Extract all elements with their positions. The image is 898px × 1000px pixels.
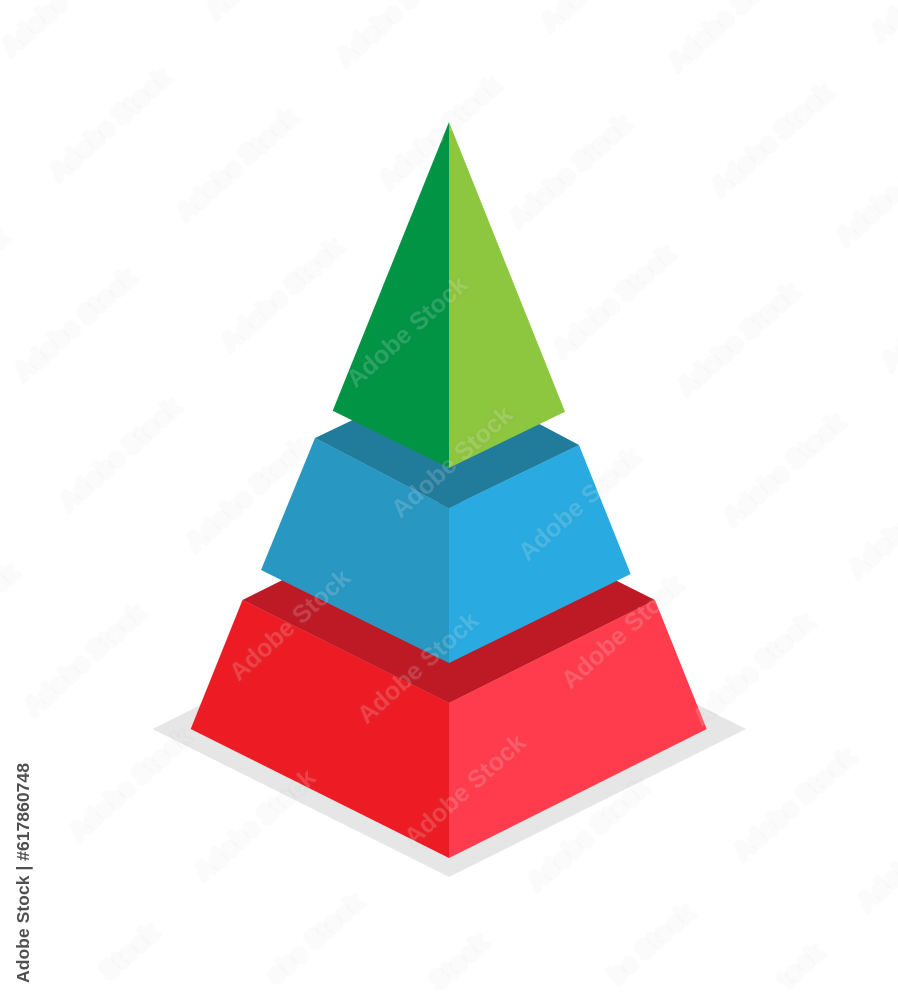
watermark pattern: Adobe Stock xyxy=(706,78,838,202)
bottom tier: red xyxy=(191,497,707,858)
red top face xyxy=(242,497,655,703)
blue right face xyxy=(449,445,631,663)
watermark pattern: Adobe Stock xyxy=(718,408,850,532)
watermark pattern: Adobe Stock xyxy=(54,393,186,517)
watermark pattern: Adobe Stock xyxy=(352,606,484,730)
watermark pattern: Adobe Stock xyxy=(9,263,141,387)
watermark pattern: obe Stock xyxy=(261,889,369,989)
watermark pattern: Adobe Stock xyxy=(522,773,654,897)
watermark pattern: Adobe Stock xyxy=(513,443,645,567)
middle tier: blue xyxy=(261,375,631,663)
watermark pattern: Adobe Stock xyxy=(44,63,176,187)
top tier: green xyxy=(333,122,565,468)
blue top face xyxy=(315,375,579,508)
blue left face xyxy=(261,438,449,663)
stock credit text: Adobe Stock | #617860748 xyxy=(13,763,33,983)
watermark pattern: Adobe Stock xyxy=(504,110,636,234)
green left face xyxy=(333,122,449,468)
watermark pattern: Adobe Stock xyxy=(672,278,804,402)
red left face xyxy=(191,600,449,858)
watermark pattern: Adobe Stock xyxy=(341,270,473,394)
watermark pattern: Stock xyxy=(424,929,494,995)
red right face xyxy=(449,600,707,858)
watermark pattern: Adobe Stock xyxy=(386,400,518,524)
watermark pattern: Adobe Stock xyxy=(64,723,196,847)
watermark pattern: Adobe Stock xyxy=(181,433,313,557)
watermark pattern: be Stock xyxy=(603,899,699,989)
watermark pattern: Adobe Stock xyxy=(728,743,860,867)
ground shadow xyxy=(152,581,746,877)
watermark pattern: Adobe Stock xyxy=(189,763,321,887)
green right face xyxy=(449,122,565,468)
watermark pattern: Adobe Stock xyxy=(556,571,688,695)
watermark pattern: Adobe Stock xyxy=(374,71,506,195)
watermark pattern: Adobe Stock xyxy=(687,608,819,732)
watermark pattern: Adobe Stock xyxy=(171,103,303,227)
watermark pattern: Stock xyxy=(94,919,164,985)
watermark pattern: Adobe Stock xyxy=(224,563,356,687)
watermark pattern: Adobe Stock xyxy=(548,240,680,364)
watermark pattern: Adobe Stock xyxy=(399,728,531,852)
watermark pattern: Adobe Stock xyxy=(216,233,348,357)
watermark pattern: tock xyxy=(773,938,830,994)
watermark pattern: Adobe Stock xyxy=(19,598,151,722)
